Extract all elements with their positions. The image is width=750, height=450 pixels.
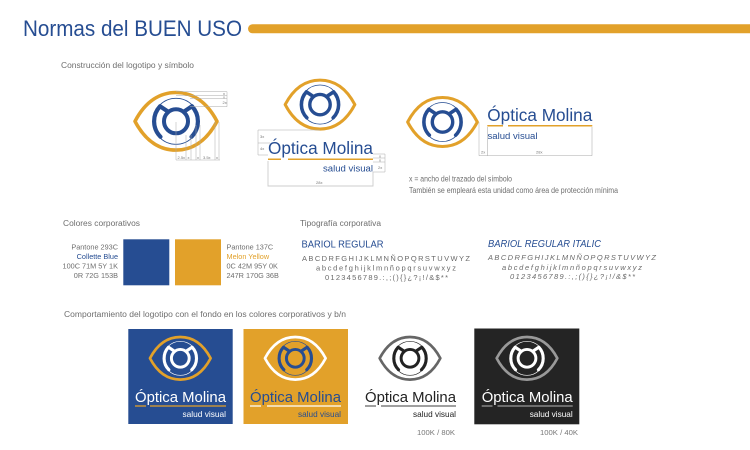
eye symbol: [150, 337, 211, 380]
panel: logo on blue: [128, 329, 233, 424]
blue colour specification: [63, 242, 118, 280]
measurement labels: x: [379, 154, 381, 158]
measurement labels: 3.5x: [203, 155, 211, 160]
section heading: logo behaviour on backgrounds: Comportamiento del logotipo con el fondo en los colores corporativos y b/n: [64, 310, 346, 319]
lowercase alphabet: abcdefghijklmnñopqrsuvwxyz: [316, 264, 456, 273]
eye symbol: [380, 337, 440, 380]
eye symbol: [497, 337, 557, 380]
logo underline: [250, 405, 341, 407]
measurement labels: x: [188, 155, 190, 160]
title: Normas del BUEN USO: [23, 16, 242, 41]
logo tagline: salud visual: [488, 131, 538, 142]
protection area diagram: [408, 98, 593, 156]
typeface specimen: regular: [302, 240, 470, 282]
logo wordmark: Óptica Molina: [482, 389, 573, 406]
measurement labels: 2x: [378, 165, 382, 170]
section heading: construction: Construcción del logotipo y símbolo: [61, 61, 195, 70]
logo underline: [365, 405, 456, 407]
logo wordmark: Óptica Molina: [365, 389, 457, 406]
logo tagline: salud visual: [530, 409, 573, 419]
logo construction diagram: [258, 80, 385, 186]
logo tagline: salud visual: [413, 409, 456, 419]
measurement labels: [260, 134, 382, 185]
note line 2: También se empleará esta unidad como área de protección mínima: [409, 186, 618, 195]
note line 1: x = ancho del trazado del símbolo: [409, 175, 512, 184]
measurement guides: [488, 127, 592, 156]
panel: logo on yellow: [244, 329, 348, 424]
measurement labels: [178, 91, 227, 160]
symbol construction diagram: [135, 91, 227, 160]
blue colour specification: Collette Blue: [77, 252, 118, 261]
logo tagline: salud visual: [182, 409, 226, 419]
measurement labels: 2x: [222, 100, 227, 105]
measurement guides: [176, 92, 227, 160]
logo tagline: salud visual: [323, 164, 373, 175]
yellow colour specification: 0C 42M 95Y 0K: [226, 262, 278, 271]
typeface name: BARIOL REGULAR: [302, 240, 384, 251]
yellow colour specification: [226, 242, 279, 280]
panel: logo greyscale on black: [474, 328, 579, 424]
yellow background: [244, 329, 348, 424]
typeface specimen: italic: [487, 239, 656, 281]
logo underline: [487, 125, 592, 127]
logo wordmark: Óptica Molina: [250, 389, 342, 406]
eye symbol: [265, 337, 326, 380]
measurement labels: 28x: [316, 180, 322, 185]
blue colour specification: 0R 72G 153B: [74, 271, 118, 280]
caption: 100K / 80K: 100K / 80K: [417, 430, 455, 437]
eye symbol: [408, 98, 477, 146]
measurement labels: 28x: [536, 150, 542, 154]
measurement labels: x: [223, 94, 225, 100]
black background: [474, 328, 579, 424]
measurement labels: 2.5x: [178, 155, 185, 160]
logo tagline: salud visual: [298, 409, 341, 419]
logo wordmark: Óptica Molina: [487, 105, 593, 125]
caption: 100K / 40K: 100K / 40K: [540, 430, 578, 437]
measurement labels: 4x: [260, 146, 264, 151]
measurement labels: x: [197, 155, 199, 160]
blue colour specification: Pantone 293C: [71, 242, 118, 251]
logo wordmark: Óptica Molina: [135, 389, 227, 406]
blue swatch: [123, 239, 169, 285]
uppercase alphabet: ABCDRFGHIJKLMNÑOPQRSTUVWYZ: [302, 254, 470, 263]
eye symbol: [285, 80, 355, 129]
digits and symbols: 0123456789.:,;(){}¿?¡!/&$**: [510, 272, 636, 281]
section heading: corporate colours: Colores corporativos: [63, 219, 140, 228]
typeface name: BARIOL REGULAR ITALIC: [488, 239, 602, 250]
section heading: corporate typography: Tipografía corporativa: [300, 219, 382, 228]
yellow colour specification: Melon Yellow: [226, 252, 270, 261]
logo underline: [482, 405, 573, 407]
panel: logo greyscale on white: [365, 337, 457, 419]
yellow colour specification: Pantone 137C: [226, 242, 273, 251]
logo underline: [268, 158, 373, 160]
title accent bar: [248, 24, 750, 33]
measurement labels: x: [379, 158, 381, 162]
yellow colour specification: 247R 170G 36B: [226, 271, 279, 280]
digits and symbols: 0123456789.:,;(){}¿?¡!/&$**: [325, 273, 448, 282]
blue background: [128, 329, 233, 424]
measurement labels: x: [223, 91, 225, 96]
note: unit definition: [409, 175, 618, 195]
yellow swatch: [175, 239, 221, 285]
lowercase alphabet: abcdefghijklmnñopqrsuvwxyz: [502, 263, 642, 272]
measurement guides: [258, 130, 385, 172]
logo underline: [135, 405, 226, 407]
measurement labels: 3x: [260, 134, 264, 139]
measurement labels: x: [216, 155, 218, 160]
blue colour specification: 100C 71M 5Y 1K: [63, 262, 118, 271]
measurement labels: 2x: [481, 150, 485, 154]
measurement labels: [481, 150, 542, 154]
logo wordmark: Óptica Molina: [268, 138, 373, 158]
uppercase alphabet: ABCDRFGHIJKLMNÑOPQRSTUVWYZ: [487, 253, 656, 262]
eye symbol: [135, 92, 217, 150]
